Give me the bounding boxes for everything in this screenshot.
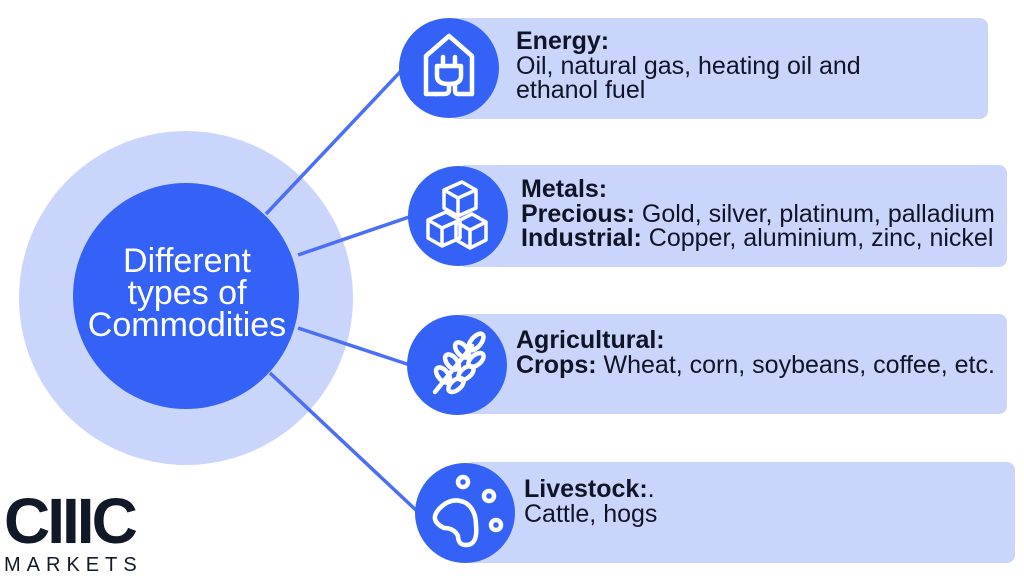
center title: Different: [123, 242, 251, 280]
icon: wheat: [407, 315, 507, 415]
connector lines: [266, 70, 418, 512]
text: livestock: Livestock:.: [524, 475, 655, 503]
text: metals: Metals:: [521, 175, 607, 203]
text: energy: Oil, natural gas, heating oil and: [516, 52, 861, 80]
card: metals: [458, 165, 1007, 267]
text: energy: [516, 27, 861, 104]
center title: types of: [127, 274, 247, 312]
text: metals: Industrial: Copper, aluminium, zinc, nickel: [521, 224, 993, 252]
text: energy: Energy:: [516, 27, 609, 55]
logo: CIIIC: [4, 485, 135, 557]
icon: metals: [408, 166, 508, 266]
text: metals: [521, 175, 995, 252]
text: metals: Precious: Gold, silver, platinum, palladium: [521, 200, 995, 228]
card: livestock: [465, 462, 1015, 563]
text: agricultural: Crops: Wheat, corn, soybeans, coffee, etc.: [516, 350, 995, 378]
text: livestock: [524, 475, 657, 528]
card: agricultural: [457, 314, 1007, 414]
text: energy: ethanol fuel: [516, 76, 645, 104]
icon: energy: [399, 18, 499, 118]
logo: MARKETS: [4, 554, 143, 576]
card: energy: [449, 18, 988, 119]
icon: paw: [415, 463, 515, 563]
inner circle: [73, 183, 299, 409]
outer circle: [19, 131, 353, 465]
text: agricultural: Agricultural:: [516, 326, 665, 354]
center title: [88, 242, 286, 344]
text: livestock: Cattle, hogs: [524, 500, 657, 528]
text: agricultural: [516, 326, 995, 378]
center title: Commodities: [88, 306, 286, 344]
